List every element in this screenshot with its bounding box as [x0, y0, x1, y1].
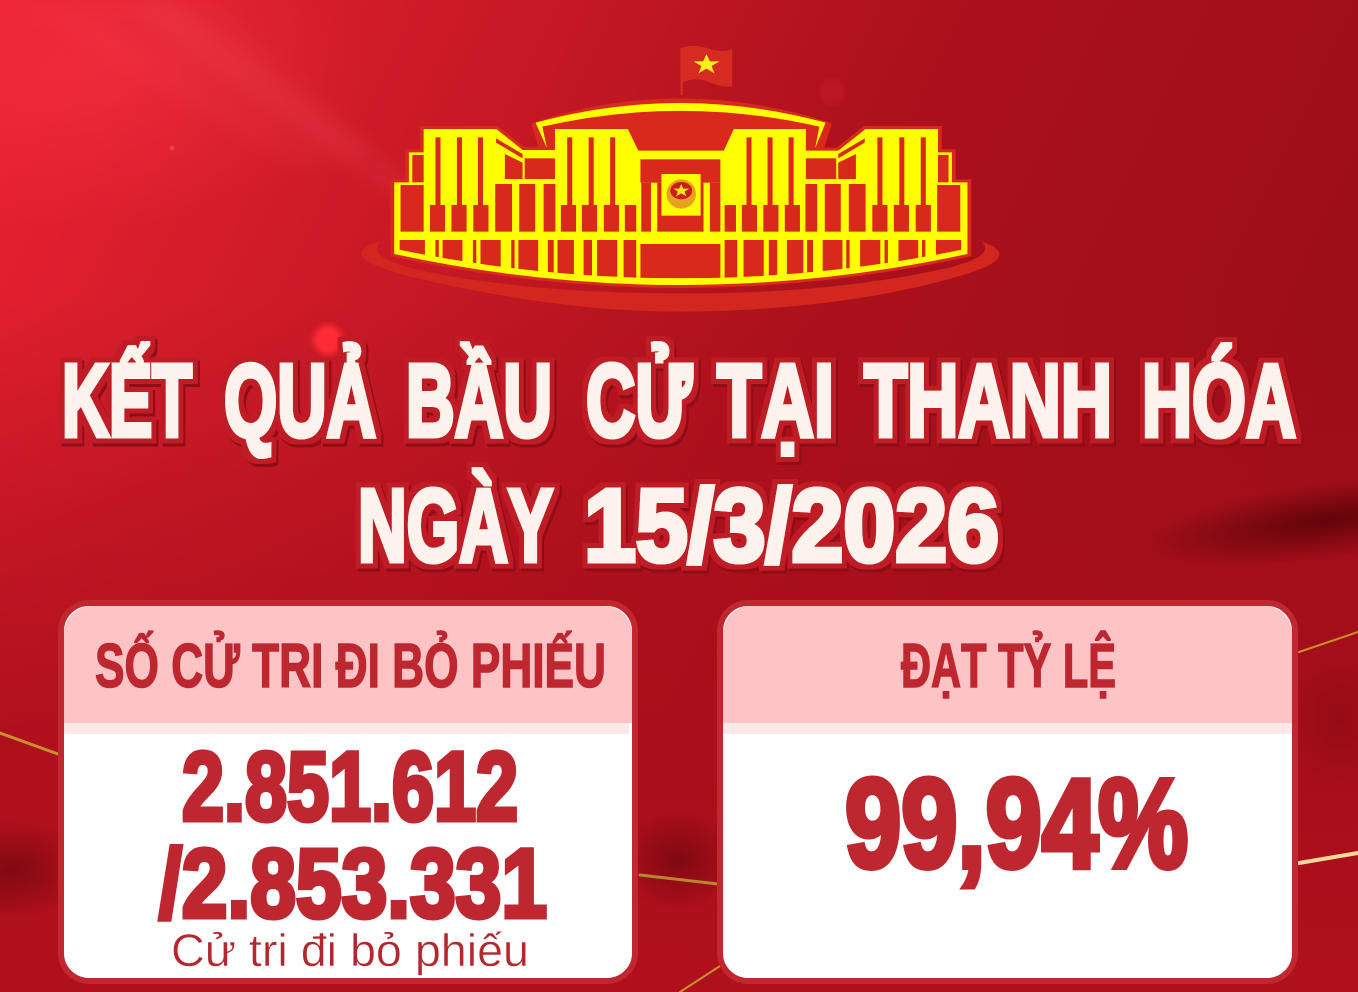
- panel: voters: [61, 603, 635, 981]
- icon: dome: [531, 98, 832, 157]
- number: voters who cast ballots: 2.851.612: [182, 732, 518, 841]
- title line 2: NGÀY: [358, 468, 553, 583]
- title line 2: [358, 468, 999, 583]
- title line 1: KẾT: [62, 343, 192, 458]
- title: [62, 342, 1296, 583]
- title line 1: CỬ: [586, 342, 692, 458]
- gold accent lines: [0, 632, 1358, 992]
- heading: voters: SỐ CỬ TRI ĐI BỎ PHIẾU: [95, 632, 606, 701]
- icon: national emblem: [661, 174, 701, 216]
- heading: turnout rate: ĐẠT TỶ LỆ: [901, 632, 1116, 701]
- title line 1: QUẢ: [224, 343, 376, 458]
- icon: base swoosh: [361, 241, 999, 312]
- caption: Cử tri đi bỏ phiếu: [171, 925, 529, 976]
- number: turnout: 99,94%: [845, 753, 1188, 894]
- title line 1: [62, 342, 1296, 458]
- building body: [394, 129, 967, 287]
- number: total voters: /2.853.331: [159, 829, 547, 938]
- title line 1: BẦU: [406, 343, 552, 458]
- lower windows: [400, 240, 962, 278]
- title line 2: 15/3/2026: [584, 468, 999, 583]
- tower slots: [412, 137, 949, 206]
- upper windows: [401, 159, 960, 232]
- title line 1: THANH: [864, 343, 1112, 458]
- panel: turnout rate: [720, 603, 1295, 981]
- title line 1: TẠI: [717, 343, 834, 458]
- icon: flag: [680, 46, 732, 95]
- icon: National Assembly building with flag: [361, 46, 999, 312]
